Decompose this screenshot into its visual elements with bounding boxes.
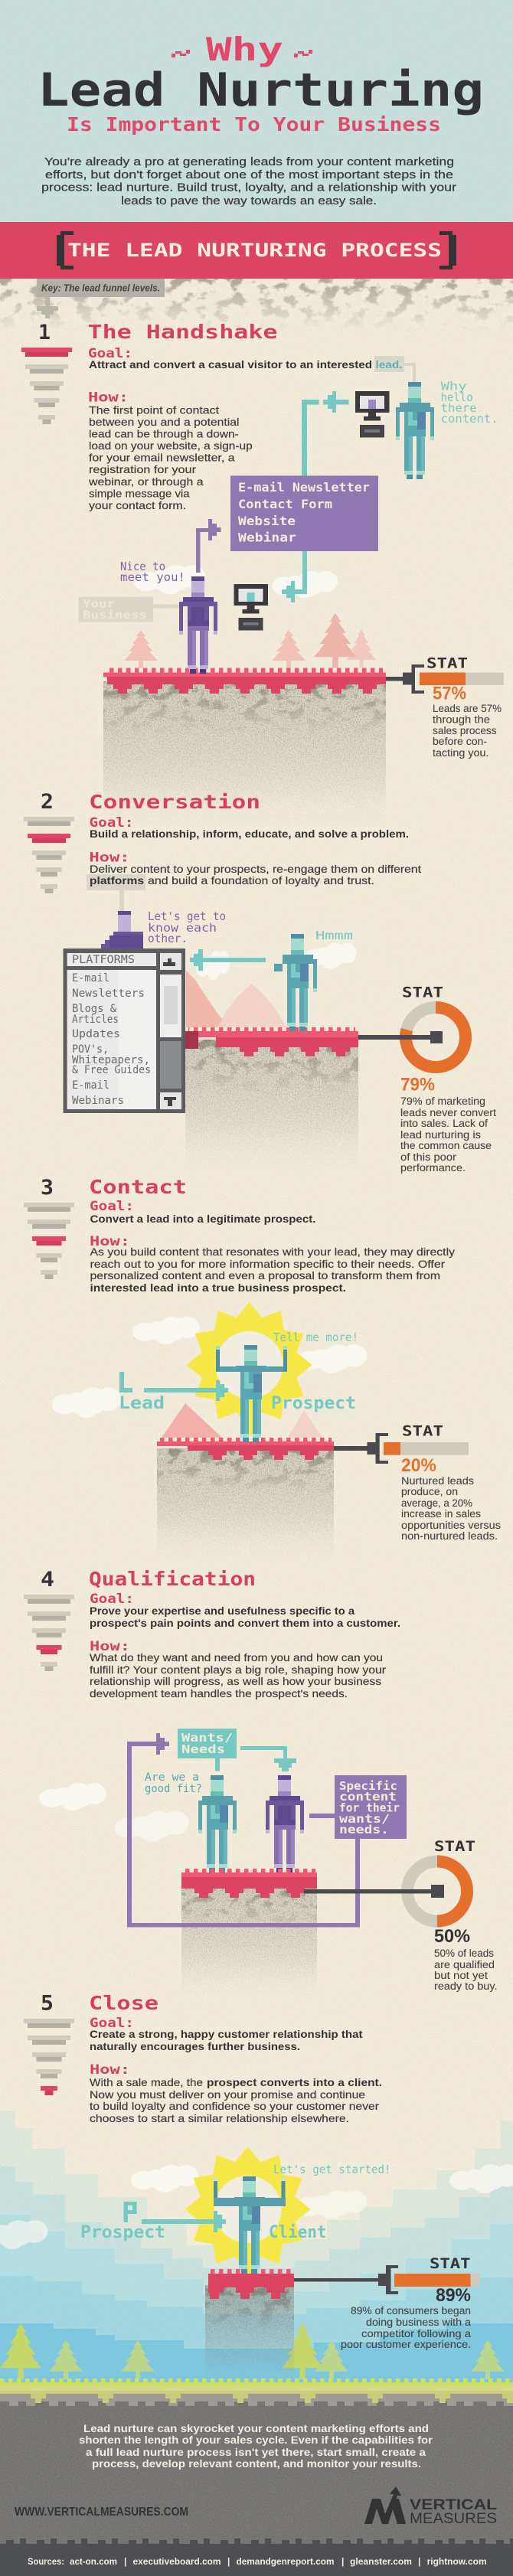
tag: Your Business: Your: [83, 599, 115, 611]
goal text: prospect's pain points and convert them into a customer.: [90, 1617, 400, 1629]
speech: Hmmm: Hmmm: [315, 929, 353, 942]
how label: How:: [90, 1639, 130, 1654]
platform: [103, 668, 386, 694]
icon: sun burst: [185, 2147, 311, 2272]
how text: [90, 863, 421, 886]
stat label: STAT: [426, 655, 468, 672]
stat description: Leads are 57%: [433, 703, 502, 714]
step number 4: 4: [41, 1568, 54, 1592]
sources line: |: [418, 2556, 420, 2567]
funnel level 5: [24, 2019, 74, 2095]
purple feedback loop: [127, 1742, 360, 1928]
intro paragraph: efforts, but don't forget about one of the most important steps in the: [45, 169, 453, 181]
how text: The first point of contact: [89, 404, 219, 416]
soil column: [157, 1448, 334, 1559]
stat description: increase in sales: [401, 1508, 481, 1520]
decoration: right tilde: [294, 50, 312, 57]
goal text: lead.: [375, 358, 403, 371]
stat description: the common cause: [400, 1140, 492, 1151]
icon: letter P: [124, 2202, 136, 2222]
how text: personalized content and even a proposal to transform them from: [90, 1269, 440, 1281]
stat description: [341, 2305, 472, 2350]
box: specific content: Specific: [339, 1779, 397, 1793]
section 2: Conversation: [24, 790, 421, 893]
sources line: act-on.com: [70, 2556, 117, 2567]
bar chart: [420, 672, 504, 685]
step number 2: 2: [41, 790, 54, 814]
ground: grass strip: [0, 2378, 513, 2392]
stat description: competitor following a: [361, 2328, 472, 2339]
connector: lead to figure: [404, 363, 416, 382]
box: Wants/Needs: Needs: [181, 1742, 225, 1756]
arrow: from lead computer to box: [302, 391, 349, 476]
speech: Why hello there content: hello: [441, 390, 473, 404]
how label: How:: [90, 1234, 130, 1249]
stat 2: 79%: [358, 984, 496, 1174]
banner: The Lead Nurturing Process: [0, 222, 513, 279]
list text: E-mail: [72, 1079, 109, 1092]
banner left bracket: [57, 231, 74, 269]
arrow: wants to business: [240, 1746, 296, 1771]
sources line: executiveboard.com: [133, 2556, 221, 2567]
soil column: [181, 1883, 317, 1998]
logo: Vertical Measures: VERTICAL: [410, 2496, 497, 2513]
intro paragraph: leads to pave the way towards an easy sale.: [121, 195, 377, 207]
funnel level 1: [21, 348, 72, 424]
speech: Let's get to know each other: [148, 909, 226, 945]
label: Prospect: Prospect: [80, 2223, 165, 2242]
list text: Webinars: [72, 1095, 124, 1107]
speech: Why hello there content: Why: [441, 380, 467, 393]
goal text: Attract and convert a casual visitor to an interested: [89, 358, 372, 371]
title block: [38, 31, 484, 135]
clouds: [134, 565, 338, 598]
key: funnel levels label: [37, 279, 165, 297]
box: specific content: needs.: [339, 1823, 389, 1837]
step number 1: 1: [38, 321, 51, 344]
title: Lead Nurturing: Lead Nurturing: [38, 64, 484, 117]
platform: [157, 1438, 334, 1460]
diagram: close scene: [0, 2147, 513, 2381]
list text: Newsletters: [72, 988, 145, 1000]
how text: webinar, or through a: [88, 475, 204, 488]
how text: lead can be through a down-: [89, 427, 239, 439]
stat connector: [358, 1031, 443, 1043]
goal label: Goal:: [90, 1199, 134, 1214]
lead highlight: [374, 356, 404, 372]
key: funnel levels label: Key: The lead funnel levels.: [41, 283, 160, 294]
how text: platforms: [90, 874, 144, 886]
speech: Let's get started: Let's get started!: [273, 2163, 391, 2176]
speech: Why hello there content: [441, 380, 498, 426]
stat description: 89% of consumers began: [351, 2305, 471, 2316]
diagram: handshake scene: [78, 363, 498, 827]
box: specific content: [335, 1775, 407, 1839]
how text: What do they want and need from you and how can you: [90, 1651, 383, 1663]
clouds: [52, 1317, 367, 1418]
speech: Let's get to know each other: other.: [148, 932, 188, 945]
heading: Close: [89, 1992, 158, 2014]
box: specific content: wants/: [339, 1812, 390, 1826]
how text: chooses to start a similar relationship elsewhere.: [90, 2112, 349, 2124]
label: Prospect: Prospect: [271, 1394, 356, 1413]
arrow head: loop into wants/needs: [156, 1733, 169, 1755]
diagram: qualification scene: [39, 1729, 407, 1998]
list text: Updates: [72, 1028, 120, 1040]
sources line: |: [341, 2556, 344, 2567]
stat label: STAT: [430, 2255, 470, 2272]
goal label: Goal:: [88, 346, 132, 361]
speech: Are we a good fit: good fit?: [145, 1783, 202, 1795]
banner right bracket: [439, 231, 456, 269]
stat description: non-nurtured leads.: [401, 1530, 498, 1542]
intro paragraph: process: lead nurture. Build trust, loyalty, and a relationship with your: [41, 182, 456, 194]
stat description: [401, 1475, 501, 1542]
clouds: [39, 1783, 189, 1842]
stat 1: 57%: [386, 655, 504, 759]
arrow: lead to prospect: [144, 1380, 228, 1401]
list text: & Free Guides: [72, 1064, 151, 1076]
box: content channels: Contact Form: [238, 497, 332, 511]
how label: How:: [89, 850, 130, 865]
icon: lead computer: [355, 391, 389, 438]
icon: letter L: [119, 1372, 132, 1392]
platform: [185, 1027, 358, 1056]
funnel level 4: [24, 1595, 74, 1671]
closing paragraph: Lead nurture can skyrocket your content marketing efforts and: [83, 2422, 429, 2434]
footer ground panel: [0, 2391, 513, 2576]
list text: Articles: [72, 1014, 119, 1026]
stat description: average, a 20%: [401, 1497, 472, 1509]
logo: Vertical Measures: MEASURES: [410, 2510, 497, 2527]
stat connector: [386, 664, 424, 694]
goal label: Goal:: [90, 2016, 134, 2031]
how text: simple message via: [89, 487, 190, 499]
arrow: box to business computer: [282, 551, 307, 602]
stat 3: 20%: [334, 1423, 501, 1542]
panel: platforms list window: [63, 948, 185, 1113]
subtitle: Is Important To Your Business: [67, 113, 441, 135]
closing paragraph: shorten the length of your sales cycle. Even if the capabilities for: [79, 2434, 433, 2446]
how text: for your email newsletter, a: [89, 452, 235, 464]
how text: load on your website, a sign-up: [89, 439, 253, 452]
funnel level 3: [24, 1203, 74, 1279]
how text: Now you must deliver on your promise and continue: [90, 2088, 365, 2101]
goal text: Convert a lead into a legitimate prospect.: [90, 1213, 315, 1225]
computer screen accent: [247, 593, 254, 602]
stat description: tacting you.: [433, 747, 488, 759]
soil column: [103, 681, 386, 827]
figure: lead with raised arm: [274, 934, 317, 1031]
how text: Deliver content to your prospects, re-engage them on different: [90, 863, 421, 875]
box: Wants/Needs: [178, 1729, 237, 1758]
stat value: 20%: [401, 1455, 436, 1476]
speech: Let's get to know each other: know each: [148, 921, 217, 935]
sources line: |: [124, 2556, 126, 2567]
how text: between you and a potential: [89, 416, 239, 428]
list text: Blogs &: [72, 1003, 117, 1015]
icon: key arrow: [37, 297, 58, 318]
step number 3: 3: [41, 1176, 54, 1200]
scrollbar: [160, 953, 181, 1109]
stat description: [433, 703, 502, 759]
arrow: prospect to client: [142, 2211, 226, 2232]
trees: [124, 613, 376, 668]
how label: How:: [90, 2062, 130, 2078]
stat description: performance.: [400, 1162, 466, 1174]
sources line: |: [227, 2556, 230, 2567]
how text: As you build content that resonates with your lead, they may directly: [90, 1246, 455, 1258]
stat description: ready to buy.: [434, 1980, 498, 1992]
box: content channels: Website: [238, 514, 296, 528]
stat label: STAT: [434, 1838, 475, 1855]
speech: Are we a good fit: Are we a: [145, 1771, 199, 1784]
how text: your contact form.: [89, 499, 186, 511]
section 4: Qualification: [24, 1568, 400, 1699]
stat description: [400, 1095, 496, 1174]
stat description: sales process: [433, 725, 497, 736]
tag: Your Business: Business: [83, 609, 147, 622]
figure: business: [266, 1775, 304, 1872]
goal text: Prove your expertise and usefulness specific to a: [90, 1605, 355, 1617]
title: Why: Why: [206, 31, 283, 68]
soil column: [185, 1040, 358, 1170]
list text: [72, 954, 151, 1107]
how text: and build a foundation of loyalty and trust.: [148, 874, 374, 886]
connector: platforms to figure: [119, 890, 124, 911]
icon: business computer: [234, 584, 268, 631]
how label: How:: [88, 390, 129, 406]
mountains: [162, 1403, 322, 1438]
stat description: produce, on: [401, 1486, 458, 1497]
stat description: [434, 1948, 498, 1992]
goal text: [90, 1605, 400, 1629]
goal text: Build a relationship, inform, educate, and solve a problem.: [90, 828, 409, 840]
connector: wants to prospect: [215, 1758, 220, 1771]
stat description: lead nurturing is: [400, 1129, 481, 1141]
step number 5: 5: [41, 1992, 54, 2016]
speech: Nice to meet you: meet you!: [120, 570, 185, 584]
heading: Contact: [89, 1176, 187, 1198]
stat description: 79% of marketing: [400, 1095, 485, 1107]
logo: Vertical Measures: [364, 2486, 497, 2527]
list text: POV's,: [72, 1043, 109, 1056]
stat 4: 50%: [304, 1838, 498, 1992]
stat value: 89%: [436, 2285, 471, 2306]
section 1: The Handshake: [21, 321, 404, 511]
platforms highlight: [87, 874, 145, 890]
stat label: STAT: [402, 984, 443, 1001]
stat connector: [334, 1433, 388, 1464]
trees: [0, 2323, 505, 2379]
stat description: but not yet: [434, 1970, 488, 1981]
stat description: before con-: [433, 736, 487, 747]
stat description: into sales. Lack of: [400, 1118, 488, 1129]
background: sky layers at the bottom: [0, 2111, 513, 2396]
figure: business reaching to panel: [93, 911, 143, 958]
stat label: STAT: [402, 1423, 443, 1440]
heading: The Handshake: [87, 321, 277, 343]
speech: Nice to meet you: Nice to: [120, 560, 165, 573]
donut chart: [407, 1862, 467, 1921]
banner title: THE LEAD NURTURING PROCESS: [67, 240, 442, 261]
how text: [90, 1246, 455, 1294]
box: content channels: E-mail Newsletter: [238, 480, 370, 495]
list text: PLATFORMS: [72, 954, 135, 966]
bar chart: [384, 1442, 469, 1455]
box: Wants/Needs: Wants/: [181, 1731, 233, 1745]
platform: [181, 1869, 317, 1898]
sources line: [28, 2556, 487, 2567]
how text: to build loyalty and confidence so your customer never: [90, 2100, 379, 2112]
how text: relationship will progress, as well as how your business: [90, 1675, 381, 1687]
label: Lead: Lead: [119, 1394, 165, 1413]
how text: reach out to you for more information specific to their needs. Offer: [90, 1258, 445, 1270]
clouds: [0, 2164, 513, 2249]
decoration: left tilde: [172, 50, 190, 57]
stat description: leads never convert: [400, 1107, 496, 1118]
list text: Whitepapers,: [72, 1054, 150, 1066]
box: specific content: content: [339, 1790, 397, 1804]
stat description: are qualified: [434, 1959, 495, 1970]
paper grunge under banner: [0, 279, 513, 332]
stat connector: [294, 2265, 398, 2294]
section 3: Contact: [24, 1176, 455, 1294]
goal label: Goal:: [89, 815, 133, 831]
background: header pale teal: [0, 0, 513, 222]
speech: Why hello there content: content.: [441, 412, 498, 426]
sources line: rightnow.com: [427, 2556, 487, 2567]
stat description: through the: [433, 713, 490, 726]
arrow: lead to platforms: [190, 949, 266, 971]
stat value: 79%: [400, 1075, 435, 1095]
sources line: Sources:: [28, 2556, 64, 2567]
arrow: business to box: [196, 519, 221, 573]
figure: client with raised arms: [214, 2176, 286, 2274]
heading: Conversation: [89, 791, 260, 813]
how text: development team handles the prospect's needs.: [90, 1687, 348, 1699]
stat description: doing business with a: [366, 2316, 472, 2328]
donut chart: [406, 1007, 466, 1067]
website url: WWW.VERTICALMEASURES.COM: [15, 2506, 188, 2519]
how text: fulfill it? Your content plays a big role, shaping how your: [90, 1663, 386, 1676]
stat description: poor customer experience.: [341, 2339, 471, 2350]
goal text: Create a strong, happy customer relationship that: [90, 2028, 363, 2040]
tag: Your Business: [78, 597, 179, 622]
figure: your business (purple): [179, 576, 217, 674]
closing paragraph: a full lead nurture process isn't yet there, start small, create a: [86, 2446, 426, 2458]
box: content channels: [230, 475, 378, 551]
intro paragraph: [41, 156, 456, 207]
stat description: 50% of leads: [434, 1948, 494, 1959]
heading: Qualification: [89, 1568, 256, 1590]
icon: sun burst: [187, 1302, 312, 1428]
stat 5: 89%: [294, 2255, 479, 2350]
box: content channels: Webinar: [238, 531, 296, 545]
speech: Tell me more: Tell me more!: [273, 1330, 358, 1344]
sources line: gleanster.com: [350, 2556, 412, 2567]
how text: prospect converts into a client.: [207, 2076, 382, 2088]
how text: interested lead into a true business prospect.: [90, 1281, 346, 1294]
speech: Let's get to know each other: Let's get to: [148, 909, 226, 923]
figure: lead (teal): [396, 382, 434, 479]
figure: prospect: [198, 1775, 237, 1872]
how text: registration for your: [89, 463, 196, 475]
stat description: Nurtured leads: [401, 1475, 474, 1487]
stat connector: [304, 1885, 444, 1898]
how text: [90, 1651, 386, 1699]
how text: [88, 404, 253, 511]
speech: Are we a good fit: [145, 1771, 202, 1795]
how text: With a sale made, the: [90, 2076, 203, 2088]
list text: E-mail: [72, 972, 109, 984]
stat description: opportunities versus: [401, 1520, 501, 1531]
bar chart: [394, 2274, 479, 2287]
speech: Nice to meet you: [120, 560, 185, 584]
clouds: [196, 943, 357, 980]
stat value: 50%: [434, 1926, 470, 1947]
how text: [90, 2076, 382, 2124]
section 5: Close: [24, 1992, 382, 2124]
diagram: contact scene: [52, 1302, 367, 1559]
stat value: 57%: [433, 683, 466, 704]
funnel level 2: [24, 817, 74, 893]
sources line: demandgenreport.com: [236, 2556, 334, 2567]
computer screen accent: [368, 400, 376, 409]
speech: Why hello there content: there: [441, 401, 477, 415]
goal text: naturally encourages further business.: [90, 2040, 300, 2052]
intro paragraph: You're already a pro at generating leads from your content marketing: [44, 156, 454, 168]
goal text: [90, 2028, 363, 2052]
figure: prospect with raised arms: [216, 1345, 287, 1442]
goal label: Goal:: [90, 1592, 134, 1607]
connector: business to box: [309, 1814, 335, 1818]
box: specific content: for their: [339, 1801, 400, 1814]
diagram: conversation scene: [63, 890, 358, 1170]
mountains: [186, 971, 286, 1027]
soil column: [205, 2285, 294, 2381]
closing paragraph: process, develop relevant content, and monitor your results.: [92, 2457, 421, 2470]
label: Client: Client: [269, 2223, 326, 2242]
platform: [205, 2269, 294, 2299]
stat description: of this poor: [400, 1151, 457, 1163]
closing paragraph: [79, 2422, 433, 2470]
